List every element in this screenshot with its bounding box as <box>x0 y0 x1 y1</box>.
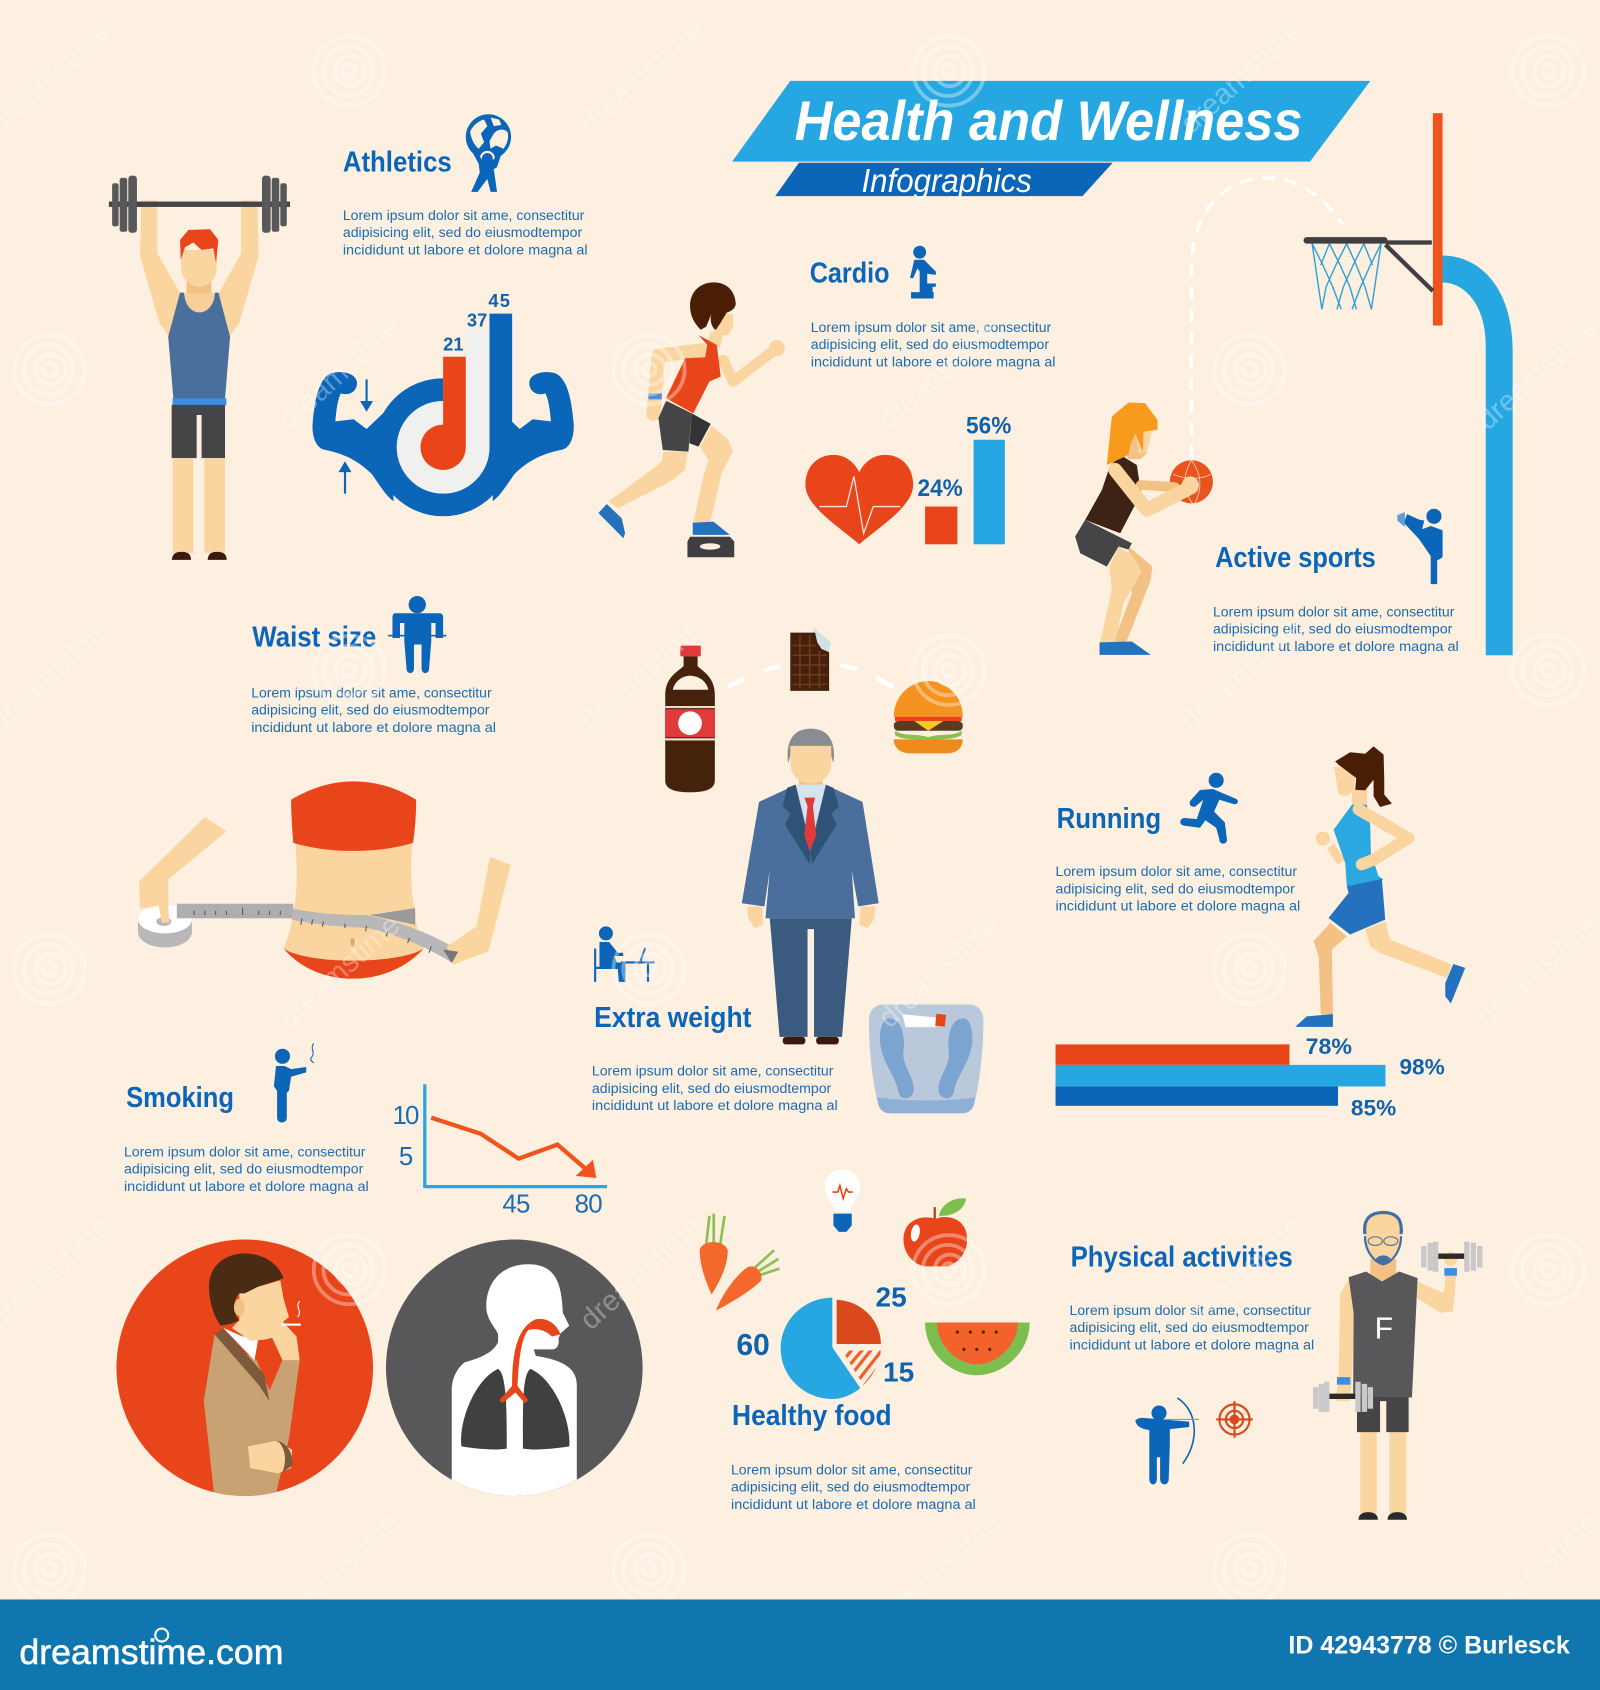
illustration: bearded man with dumbbells <box>1313 1210 1482 1520</box>
icon: archer <box>1135 1398 1199 1484</box>
body text <box>124 1143 369 1194</box>
body text: incididunt ut labore et dolore magna al <box>1213 638 1459 654</box>
body text <box>1056 863 1300 914</box>
logo swirl <box>155 1629 168 1641</box>
icon: watermelon <box>925 1322 1030 1375</box>
illustration: lungs <box>386 1239 643 1504</box>
chart: muscle radial bars <box>313 290 574 516</box>
section: smoking <box>124 1043 369 1194</box>
icon: person with measure <box>388 596 446 673</box>
body text: Lorem ipsum dolor sit ame, consectitur <box>731 1461 973 1477</box>
body text <box>592 1063 838 1113</box>
heading: Active sports <box>1215 542 1376 574</box>
subtitle: Infographics <box>861 163 1032 200</box>
body text: adipisicing elit, sed do eiusmodtempor <box>343 224 583 240</box>
body text: Lorem ipsum dolor sit ame, consectitur <box>1056 863 1297 879</box>
body text: incididunt ut labore et dolore magna al <box>811 353 1056 369</box>
heading: Smoking <box>126 1082 234 1114</box>
chart: muscle radial bars: 37 <box>467 310 487 331</box>
body text: incididunt ut labore et dolore magna al <box>343 241 588 257</box>
watermark pattern: dreamstime <box>574 14 708 140</box>
body text: adipisicing elit, sed do eiusmodtempor <box>1070 1319 1309 1335</box>
heading: Physical activities <box>1071 1241 1293 1273</box>
chart: food pie: 15 <box>883 1357 914 1388</box>
chart: smoking line: 10 <box>392 1102 419 1130</box>
dashed connector <box>728 665 894 688</box>
body text: adipisicing elit, sed do eiusmodtempor <box>251 702 490 718</box>
section: extra weight <box>592 926 838 1113</box>
section: waist size <box>251 596 496 735</box>
title: Health and Wellness <box>795 89 1302 152</box>
body text: Lorem ipsum dolor sit ame, consectitur <box>124 1143 366 1159</box>
section: athletics <box>343 114 588 257</box>
chart: food pie: 60 <box>736 1329 770 1362</box>
chart: smoking line: 45 <box>502 1191 530 1219</box>
body text: incididunt ut labore et dolore magna al <box>1056 898 1300 914</box>
body text: incididunt ut labore et dolore magna al <box>124 1178 369 1194</box>
body text: Lorem ipsum dolor sit ame, consectitur <box>811 319 1052 335</box>
section: cardio <box>810 246 1056 369</box>
watermark pattern: dreamstime <box>873 909 1007 1035</box>
chart: cardio heart and bars: 56% <box>966 413 1011 439</box>
icon: person at desk <box>594 926 654 982</box>
watermark pattern: dreamstime <box>873 311 1007 436</box>
icon: atlas holding globe <box>466 114 511 192</box>
illustration: cardio runner <box>598 282 785 557</box>
body text <box>731 1461 976 1512</box>
body text: Lorem ipsum dolor sit ame, consectitur <box>1213 604 1455 620</box>
body text: incididunt ut labore et dolore magna al <box>731 1496 976 1512</box>
footer logo: dreamstime.com <box>19 1632 284 1672</box>
chart: muscle radial bars: 21 <box>443 333 464 354</box>
watermark pattern: dreamstime <box>873 1507 1007 1633</box>
icon: burger <box>894 681 963 753</box>
icon: step-up person <box>910 246 936 299</box>
watermark pattern: dreamstime <box>574 613 708 738</box>
illustration: man smoking <box>116 1239 373 1498</box>
heading: Waist size <box>252 622 376 654</box>
body text <box>1213 604 1459 654</box>
section: healthy food <box>700 1169 1030 1512</box>
body text: Lorem ipsum dolor sit ame, consectitur <box>592 1063 834 1079</box>
section: physical activities <box>1070 1241 1314 1484</box>
body text: adipisicing elit, sed do eiusmodtempor <box>731 1479 971 1495</box>
chart: food pie <box>736 1281 914 1399</box>
body text: incididunt ut labore et dolore magna al <box>592 1097 838 1113</box>
icon: runner <box>1180 773 1238 844</box>
body text: adipisicing elit, sed do eiusmodtempor <box>1213 621 1453 637</box>
watermark pattern: dreamstime <box>272 311 407 436</box>
section: running <box>1056 773 1300 914</box>
chart: running bars <box>1056 1034 1445 1121</box>
watermark pattern: dreamstime <box>1175 1211 1309 1336</box>
icon: target <box>1216 1401 1253 1438</box>
section: active sports <box>1213 509 1459 654</box>
heading: Cardio <box>810 257 889 289</box>
heading: Running <box>1057 803 1161 835</box>
title banner <box>732 81 1370 200</box>
icon: carrots <box>700 1214 780 1311</box>
body text <box>811 319 1056 369</box>
body text: adipisicing elit, sed do eiusmodtempor <box>592 1080 832 1096</box>
icon: apple <box>904 1198 967 1266</box>
heading: Athletics <box>343 146 452 178</box>
illustration: bearded man with dumbbells: F <box>1375 1313 1393 1346</box>
body text: adipisicing elit, sed do eiusmodtempor <box>811 336 1049 352</box>
watermark pattern: dreamstime <box>1175 14 1309 140</box>
body text <box>251 684 496 735</box>
chart: smoking line: 80 <box>575 1191 603 1219</box>
chart: food pie: 25 <box>875 1281 907 1312</box>
illustration: basketball player <box>1075 403 1213 655</box>
watermark pattern: dreamstime <box>272 1507 407 1633</box>
heading: Healthy food <box>732 1400 892 1432</box>
body text: incididunt ut labore et dolore magna al <box>1070 1336 1314 1352</box>
body text: Lorem ipsum dolor sit ame, consectitur <box>343 207 585 223</box>
chart: running bars: 85% <box>1351 1096 1396 1121</box>
icon group: junk food <box>665 627 963 792</box>
chart: running bars: 98% <box>1399 1055 1445 1080</box>
body text: adipisicing elit, sed do eiusmodtempor <box>124 1161 364 1177</box>
chart: smoking line <box>392 1084 607 1219</box>
body text: Lorem ipsum dolor sit ame, consectitur <box>251 684 492 700</box>
chart: cardio heart and bars <box>805 413 1011 544</box>
illustration: woman running <box>1295 746 1465 1027</box>
icon: megaphone person <box>1397 509 1443 584</box>
body text: Lorem ipsum dolor sit ame, consectitur <box>1070 1302 1311 1318</box>
chart: muscle radial bars: 45 <box>488 290 510 311</box>
illustration: weightlifter <box>109 176 290 560</box>
body text: adipisicing elit, sed do eiusmodtempor <box>1056 881 1295 897</box>
icon: smoking person <box>274 1043 314 1123</box>
chart: smoking line: 5 <box>399 1143 413 1171</box>
watermark pattern: dreamstime <box>1175 613 1309 738</box>
icon: light bulb <box>825 1169 860 1232</box>
chart: running bars: 78% <box>1306 1034 1352 1059</box>
illustration: basketball hoop <box>1191 113 1513 655</box>
body text: incididunt ut labore et dolore magna al <box>251 719 496 735</box>
illustration: overweight man <box>742 729 879 1044</box>
illustration: waist measurement <box>138 781 511 979</box>
icon: chocolate bar <box>790 627 831 691</box>
watermark pattern: dreamstime <box>574 1211 708 1336</box>
icon: cola bottle <box>665 646 715 792</box>
footer bar <box>0 1599 1600 1690</box>
footer credit: ID 42943778 © Burlesck <box>1288 1632 1570 1659</box>
heading: Extra weight <box>594 1002 752 1034</box>
chart: cardio heart and bars: 24% <box>918 476 963 502</box>
body text <box>1070 1302 1314 1352</box>
watermark pattern: dreamstime <box>272 909 407 1035</box>
body text <box>343 207 588 257</box>
icon: bathroom scale <box>869 1005 983 1113</box>
